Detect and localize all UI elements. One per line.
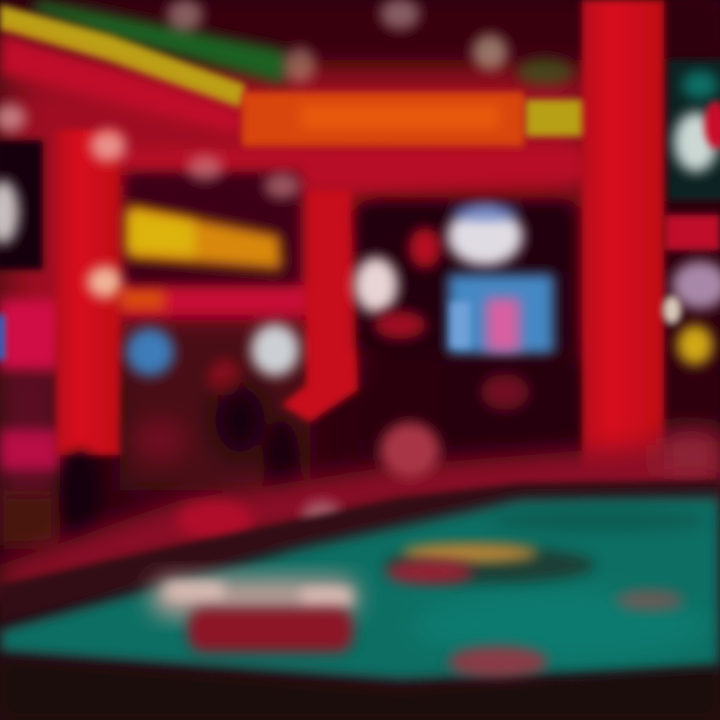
left dark panel xyxy=(0,104,43,360)
green gaming table xyxy=(0,497,720,680)
centre pillar xyxy=(282,190,358,422)
central dark cluster with lights xyxy=(0,205,570,545)
orange sign xyxy=(242,92,586,146)
horizontal red beams xyxy=(0,145,720,470)
yellow orange sign xyxy=(125,155,300,284)
large right pillar xyxy=(582,0,664,476)
blue and pink screen xyxy=(447,203,554,354)
red floor behind table xyxy=(0,422,720,595)
ceiling: green and yellow band xyxy=(0,0,573,135)
left pillar xyxy=(56,130,165,455)
chip stacks on table xyxy=(152,543,684,678)
bottom dark vignette xyxy=(0,660,720,720)
table rim xyxy=(0,480,720,618)
right side screens xyxy=(663,60,720,365)
dark machine base xyxy=(440,362,575,452)
